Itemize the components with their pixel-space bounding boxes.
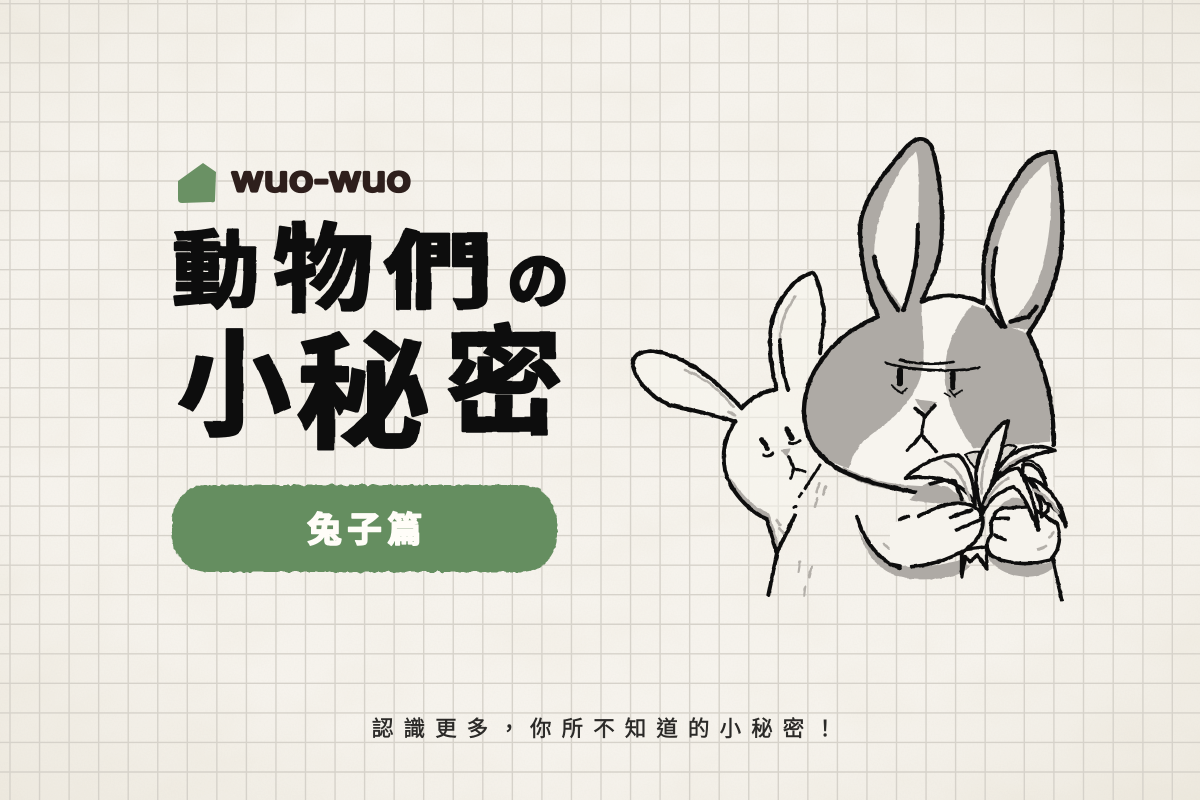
footer tagline: 認識更多，你所不知道的小秘密！ bbox=[372, 717, 846, 741]
title: の bbox=[507, 248, 569, 317]
big rabbit outline bbox=[804, 139, 1062, 493]
small rabbit fur marks bbox=[777, 483, 826, 595]
small rabbit mouth and lids bbox=[763, 441, 805, 478]
right ear inner bbox=[994, 162, 1051, 325]
back leaves bbox=[965, 445, 1046, 478]
small rabbit bbox=[633, 273, 826, 595]
pill background bbox=[172, 485, 557, 572]
left leaf bbox=[905, 455, 975, 505]
right hand bbox=[987, 507, 1059, 564]
big rabbit nose bbox=[915, 399, 937, 415]
lower arm shadow bbox=[858, 530, 1056, 579]
right hand fur marks bbox=[1038, 533, 1053, 549]
center leaf bbox=[976, 421, 1008, 508]
head fill bbox=[804, 296, 1054, 493]
brand logo bbox=[178, 160, 411, 203]
title: 小 bbox=[176, 323, 292, 451]
left under-leaf line bbox=[931, 480, 962, 499]
left hand bbox=[890, 503, 983, 567]
big rabbit fur marks bbox=[883, 544, 906, 557]
title bbox=[172, 216, 569, 465]
top right leaf bbox=[994, 447, 1055, 478]
hands and leaf bundle bbox=[890, 421, 1066, 600]
title: 動 bbox=[172, 225, 260, 319]
big rabbit bbox=[804, 139, 1066, 600]
illustration: two rabbits bbox=[633, 139, 1066, 600]
small rabbit neck ticks bbox=[794, 465, 820, 507]
brand name: wuo-wuo bbox=[231, 160, 411, 200]
big rabbit arm bbox=[857, 516, 910, 568]
leaf tips under hands bbox=[962, 547, 987, 577]
title: 密 bbox=[445, 319, 563, 451]
left ear inner bbox=[874, 152, 919, 307]
small rabbit fill bbox=[633, 273, 824, 553]
leaf veins bbox=[945, 450, 1058, 513]
small rabbit nose bbox=[781, 448, 791, 457]
big rabbit eyes bbox=[900, 371, 953, 387]
left ear bbox=[860, 139, 942, 317]
big rabbit brow bbox=[886, 360, 979, 370]
right face patch bbox=[945, 305, 1051, 448]
small rabbit ear shading bbox=[685, 297, 795, 415]
big rabbit eye wrinkles bbox=[892, 385, 962, 397]
left hand outline and fingers bbox=[890, 503, 983, 567]
title: 物 bbox=[273, 216, 373, 323]
pill label: 兔子篇 bbox=[307, 511, 427, 550]
grey shade behind leaves bbox=[910, 482, 1037, 527]
small rabbit outline bbox=[633, 273, 824, 595]
title: 秘 bbox=[296, 325, 430, 465]
right drooping leaf bbox=[1022, 464, 1049, 517]
icon: green house bbox=[178, 163, 216, 203]
head shadow under chin bbox=[840, 467, 967, 502]
right hand fingers and side bbox=[993, 518, 1062, 600]
small rabbit eyes bbox=[762, 429, 792, 448]
far right drooping leaf bbox=[1030, 478, 1066, 527]
subtitle pill bbox=[172, 485, 557, 572]
small rabbit shadow bbox=[730, 477, 778, 553]
big curved leaf bbox=[981, 468, 1038, 530]
left face patch bbox=[804, 302, 923, 468]
right ear bbox=[983, 152, 1062, 330]
big rabbit mouth bbox=[907, 405, 936, 452]
title: 們 bbox=[383, 225, 493, 319]
